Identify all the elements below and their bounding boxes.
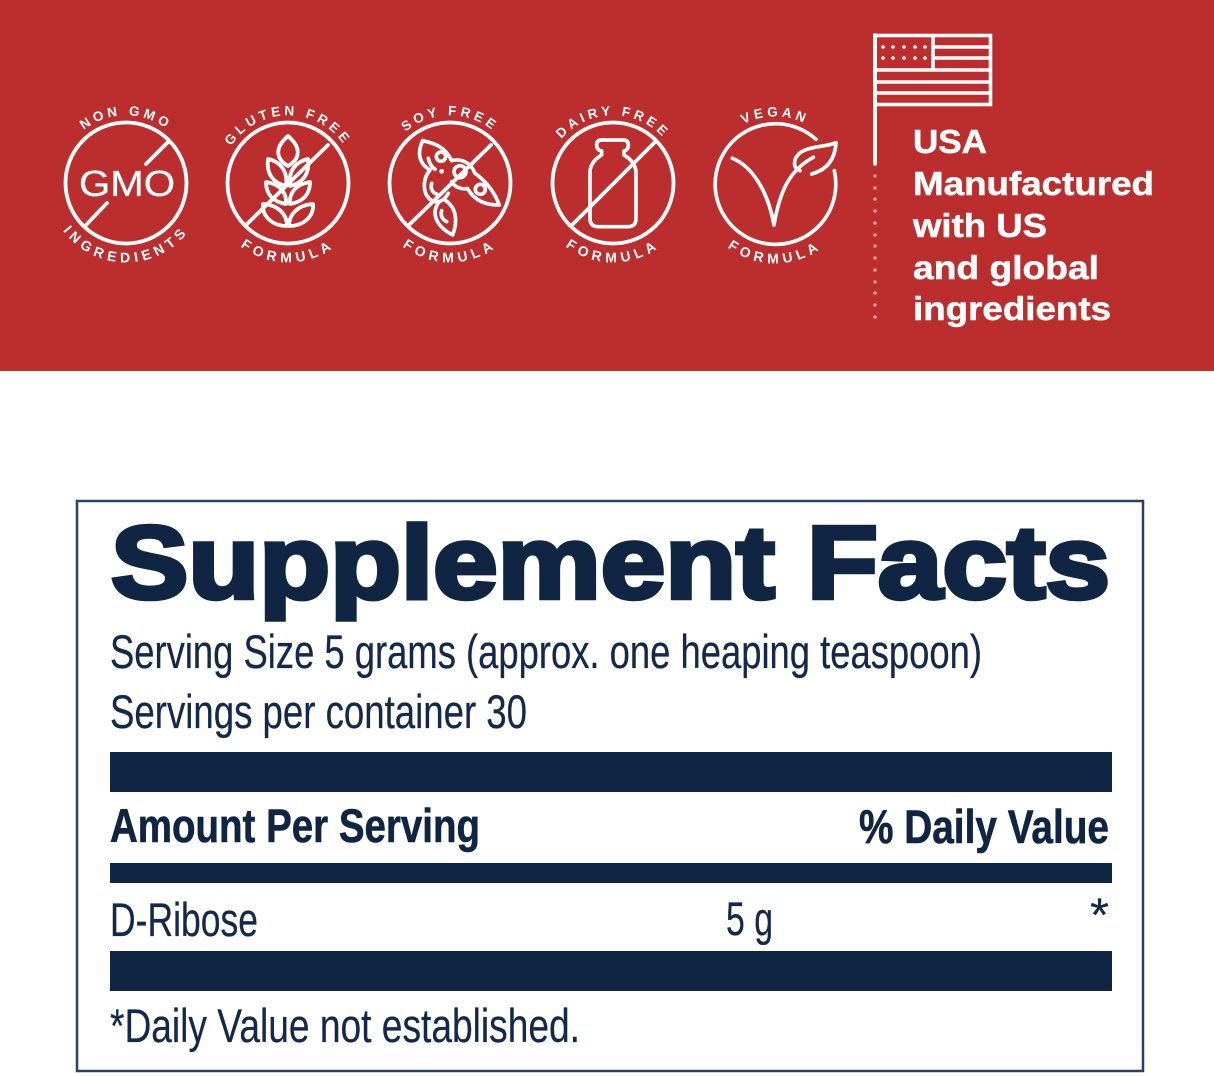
icon: non GMO badge [63, 106, 188, 262]
divider bar: middle [110, 863, 1112, 883]
text: USA manufacturing claim [912, 123, 1154, 327]
icon: soy free badge: FORMULA [403, 238, 494, 262]
text: USA manufacturing claim: and global [913, 249, 1099, 286]
icon: American flag [875, 35, 990, 164]
divider bar: bottom [110, 951, 1112, 991]
ingredient daily value asterisk: * [1090, 888, 1109, 941]
icon: vegan badge: VEGAN [740, 107, 806, 123]
icon: gluten free badge: FORMULA [241, 238, 332, 262]
panel: supplement facts label [77, 501, 1143, 1071]
icon: dairy free badge: FORMULA [566, 238, 656, 262]
icon: non GMO badge: INGREDIENTS [63, 225, 185, 262]
icon: soy free badge: SOY FREE [402, 106, 496, 130]
footnote: *Daily Value not established. [110, 999, 580, 1052]
icon: non GMO badge: NON GMO [79, 106, 168, 130]
icon: gluten free badge [226, 106, 350, 262]
column heading: amount per serving: Amount Per Serving [110, 799, 480, 852]
icon: dairy free badge [550, 106, 676, 262]
icon: non GMO badge: GMO [79, 163, 175, 204]
text: USA manufacturing claim: Manufactured [913, 165, 1154, 202]
icon: soy free badge [388, 106, 512, 262]
ingredient row: D-Ribose: D-Ribose [110, 893, 258, 946]
text: serving size: Serving Size 5 grams (approx. one heaping teaspoon) [110, 625, 982, 678]
text: servings per container: Servings per container 30 [110, 685, 527, 738]
text: USA manufacturing claim: ingredients [913, 290, 1111, 327]
ingredient amount: 5 g [726, 892, 773, 945]
divider bar: top [110, 752, 1112, 792]
text: USA manufacturing claim: USA [913, 123, 987, 160]
icon: vegan badge: FORMULA [728, 240, 818, 264]
heading: Supplement Facts: Supplement Facts [111, 505, 1110, 620]
panel: red certifications banner [0, 0, 1214, 371]
icon: vegan badge [713, 107, 838, 264]
icon: dairy free badge: DAIRY FREE [555, 106, 668, 138]
text: USA manufacturing claim: with US [912, 207, 1047, 244]
column heading: daily value: % Daily Value [859, 800, 1109, 853]
dotted flagpole line [873, 174, 877, 319]
icon: gluten free badge: GLUTEN FREE [226, 106, 350, 144]
